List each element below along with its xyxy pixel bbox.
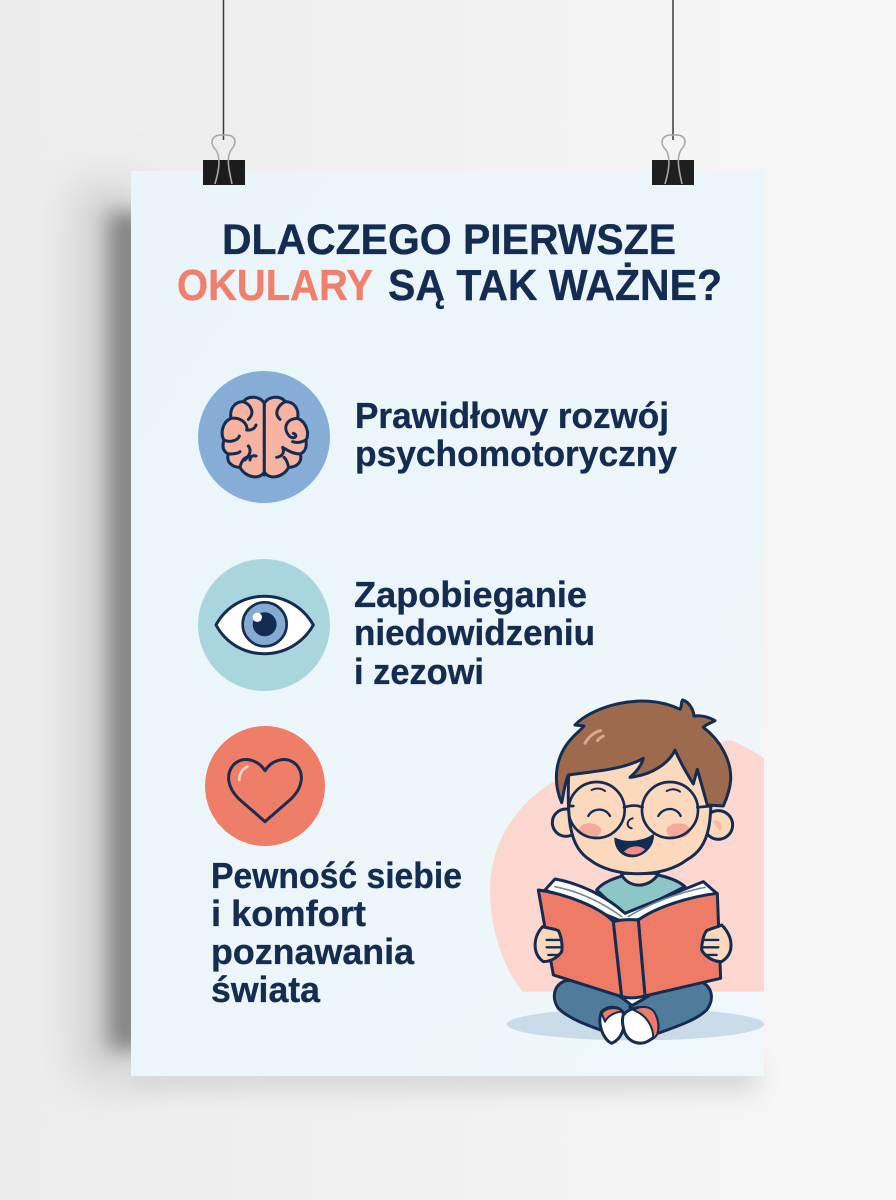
illustration: boy reading a book — [490, 700, 764, 1043]
floor shadow — [507, 1008, 764, 1040]
glasses — [569, 782, 712, 838]
shirt — [597, 875, 685, 917]
book pages — [545, 879, 717, 923]
title — [177, 216, 722, 310]
cheeks — [579, 823, 601, 838]
label: eye: i zezowi — [354, 651, 484, 692]
pink background shape — [490, 740, 764, 992]
icon: brain — [198, 371, 330, 503]
nose — [628, 818, 633, 828]
title: SĄ TAK WAŻNE? — [388, 261, 722, 310]
hair — [556, 700, 731, 806]
eyes — [588, 809, 681, 816]
title: DLACZEGO PIERWSZE — [222, 216, 676, 264]
label: brain: Prawidłowy rozwój — [355, 395, 669, 436]
left hand — [535, 927, 562, 962]
ears — [550, 808, 572, 838]
poster shadow — [75, 185, 756, 1090]
label: heart: Pewność siebie — [211, 855, 462, 896]
face — [568, 750, 711, 874]
label: brain: psychomotoryczny — [355, 433, 677, 474]
icon: heart — [205, 726, 325, 846]
item: eye — [198, 559, 595, 692]
neck — [620, 873, 660, 884]
legs — [554, 980, 633, 1032]
item: brain — [198, 371, 677, 503]
right hand — [702, 925, 731, 962]
label: brain — [355, 395, 677, 474]
label: eye: niedowidzeniu — [354, 612, 595, 653]
label: heart: i komfort — [211, 893, 366, 934]
title: OKULARY — [177, 261, 373, 310]
hanging strings — [224, 0, 673, 140]
label: heart: świata — [211, 969, 321, 1010]
poster — [131, 171, 764, 1076]
shoes — [600, 1007, 624, 1043]
label: heart: poznawania — [211, 931, 415, 972]
binder clip right — [652, 135, 694, 185]
book spine — [613, 920, 645, 998]
book left cover — [538, 890, 622, 997]
label: eye — [354, 574, 595, 692]
mouth — [615, 835, 653, 857]
binder clip left — [203, 135, 245, 185]
item: heart — [205, 726, 462, 1010]
label: heart — [211, 855, 462, 1010]
icon: eye — [198, 559, 330, 691]
label: eye: Zapobieganie — [354, 574, 587, 615]
book right cover — [638, 893, 721, 996]
